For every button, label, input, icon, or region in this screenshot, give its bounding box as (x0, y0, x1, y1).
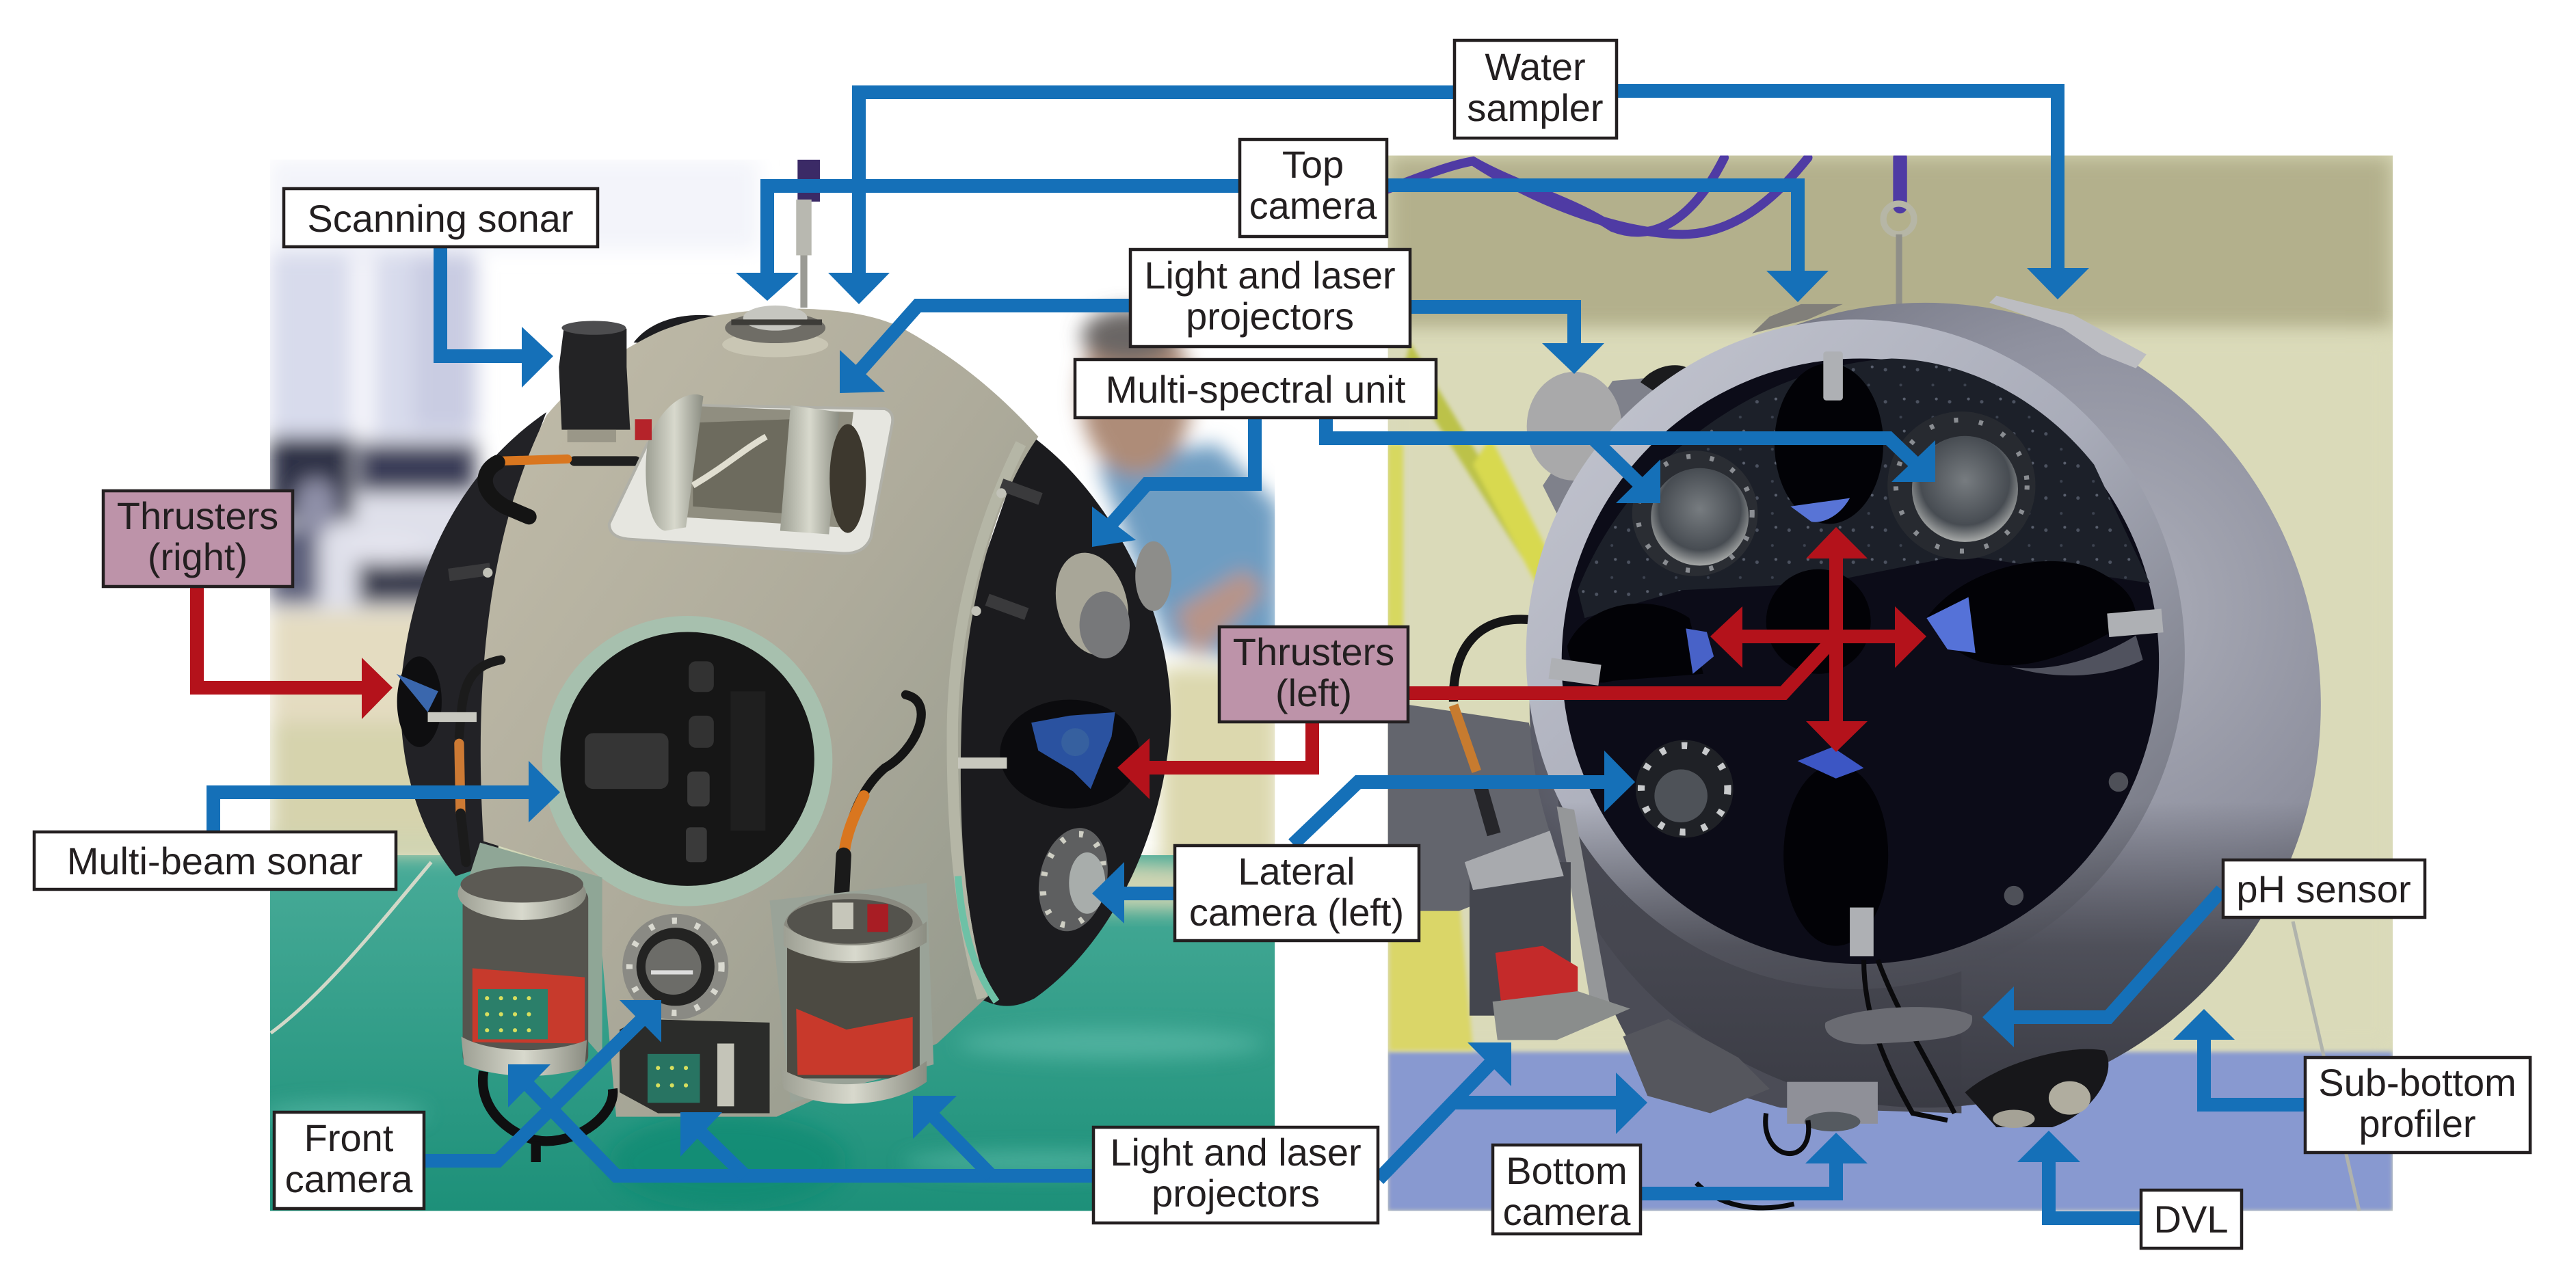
arrow: top camera to left view (736, 186, 1238, 301)
mounting tabs (1549, 351, 2164, 956)
label: sub-bottom profiler: Sub-bottom (2318, 1061, 2517, 1104)
arrow: front camera (425, 1000, 661, 1161)
label: front camera: camera (285, 1157, 413, 1200)
background: blurred workshop (261, 160, 1279, 1211)
label: light and laser projectors bottom: Light and laser (1110, 1131, 1362, 1174)
rope and hook (796, 160, 820, 308)
arrow: pH sensor (1982, 890, 2222, 1047)
dark outer shell left (401, 412, 546, 876)
left light and laser projector (457, 843, 602, 1076)
thruster right side of photo (958, 699, 1139, 809)
arrow: thrusters right (197, 588, 393, 719)
label: front camera (274, 1112, 424, 1209)
bottom devices (1465, 807, 2108, 1208)
bottom camera (1787, 1082, 1878, 1131)
right light and laser projector (770, 883, 933, 1104)
arrow: thrusters left to cross (1409, 527, 1926, 752)
lateral camera (1038, 828, 1108, 931)
label: DVL (2141, 1190, 2242, 1248)
background: yellow hall (1388, 156, 2394, 1211)
center lower projector (620, 1019, 770, 1114)
arrow: top camera to right view (1388, 185, 1829, 302)
label: scanning sonar: Scanning sonar (307, 197, 574, 240)
label: pH sensor (2223, 860, 2425, 917)
label: bottom camera (1493, 1145, 1641, 1234)
cables (1697, 960, 1954, 1208)
label: thrusters right: (right) (148, 535, 248, 578)
shell slots (448, 479, 1043, 620)
label: thrusters right (103, 491, 293, 587)
light disc (1623, 1019, 1770, 1114)
silver side cylinder (1527, 365, 1697, 527)
label: top camera: camera (1249, 184, 1377, 227)
label: multi-spectral unit: Multi-spectral unit (1106, 368, 1406, 411)
arrow: thrusters left to left view (1117, 723, 1312, 799)
front-right dome lens (1056, 541, 1172, 659)
thruster left side of photo (397, 656, 477, 747)
label: light and laser projectors top (1130, 250, 1410, 347)
beige hull (481, 309, 1038, 1117)
label: multi-beam sonar: Multi-beam sonar (67, 839, 362, 883)
label: scanning sonar (284, 189, 598, 247)
arrow: water sampler to top of right view (1618, 91, 2089, 299)
hook (1883, 204, 1914, 304)
front camera (622, 914, 728, 1020)
label: front camera: Front (304, 1116, 394, 1159)
label: light and laser projectors bottom: projectors (1152, 1172, 1320, 1215)
label: thrusters left: (left) (1275, 671, 1352, 714)
top light and laser projector (609, 394, 892, 554)
label: pH sensor: pH sensor (2236, 867, 2411, 911)
lower hull slot (1825, 1007, 1972, 1045)
label: lateral camera left: Lateral (1238, 850, 1355, 893)
label: sub-bottom profiler (2305, 1058, 2530, 1153)
support arm and cable (1388, 619, 1564, 911)
label: bottom camera: Bottom (1506, 1149, 1628, 1192)
label: DVL: DVL (2154, 1198, 2228, 1241)
sphere body (1526, 296, 2321, 1114)
black front window (1549, 351, 2164, 964)
label: top camera: Top (1282, 143, 1344, 186)
arrow: light and laser bottom to left view (508, 1064, 1092, 1176)
label: thrusters left: Thrusters (1233, 630, 1394, 673)
label: sub-bottom profiler: profiler (2359, 1102, 2476, 1145)
scanning sonar head (559, 321, 630, 442)
label: multi-spectral unit (1075, 360, 1436, 418)
arrow: sub-bottom profiler (2173, 1009, 2304, 1105)
DVL / sub-bottom head (1965, 1049, 2108, 1128)
label: water sampler: sampler (1467, 86, 1604, 129)
arrow: lateral camera to right view (1293, 751, 1635, 844)
purple ropes (1388, 158, 1900, 234)
photo: front view of robot (261, 160, 1279, 1211)
arrow: light and laser to right view (1411, 307, 1604, 374)
label: multi-beam sonar (34, 832, 396, 889)
cable orange left (459, 459, 921, 911)
arrow: bottom camera (1642, 1133, 1868, 1194)
label: lateral camera left: camera (left) (1189, 891, 1404, 934)
arrow: water sampler to top of left view (828, 92, 1453, 304)
photo: rear view of robot (1388, 156, 2394, 1211)
tether line (2293, 921, 2359, 1211)
label: thrusters left (1219, 627, 1408, 722)
label: lateral camera left (1175, 846, 1419, 941)
dark outer shell right (960, 440, 1171, 1006)
lower legs (483, 1071, 613, 1162)
multi-beam sonar window (542, 616, 832, 906)
arrow: light and laser bottom to right view (1379, 1042, 1647, 1179)
label: light and laser projectors bottom (1093, 1127, 1378, 1223)
side projector (1465, 807, 1630, 1040)
thruster blades (1686, 498, 1976, 779)
label: thrusters right: Thrusters (117, 494, 278, 537)
label: water sampler: Water (1485, 45, 1586, 88)
arrow: multi-beam sonar (213, 761, 560, 831)
label: light and laser projectors top: Light and laser (1144, 254, 1396, 297)
arrow: DVL (2017, 1131, 2140, 1218)
arrow: lateral camera to left view (1092, 862, 1173, 924)
arrow: scanning sonar (440, 248, 553, 388)
arrow: light and laser to left view (840, 306, 1129, 393)
robot sphere body (397, 306, 1171, 1162)
label: water sampler (1455, 40, 1617, 138)
top mount (722, 306, 828, 357)
label: bottom camera: camera (1503, 1190, 1631, 1233)
arrow: multi-spectral to left view (1092, 419, 1255, 547)
label: top camera (1240, 139, 1387, 237)
lens lateral (1636, 740, 1734, 838)
label: light and laser projectors top: projectors (1186, 295, 1354, 338)
arrow: multi-spectral to right view (1326, 419, 1935, 503)
lens upper right (1887, 412, 2036, 559)
lens upper left (1632, 450, 1757, 576)
thruster tunnels (1567, 364, 2136, 946)
